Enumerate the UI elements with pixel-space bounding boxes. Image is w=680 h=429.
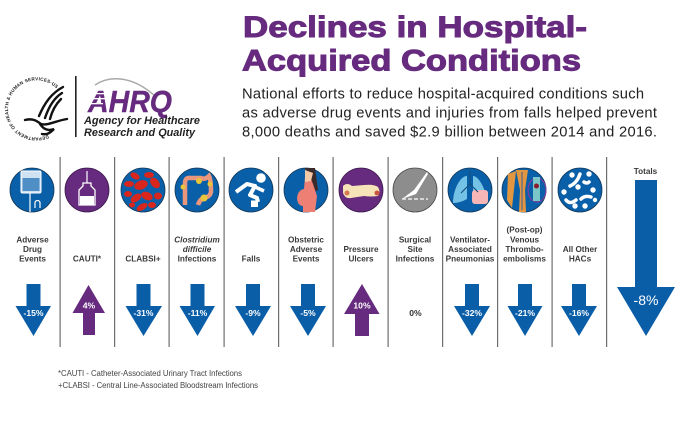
icon: falling figure [229,168,273,212]
intro paragraph: National efforts to reduce hospital-acquired conditions such [242,86,644,102]
title: Declines in Hospital- [243,11,587,44]
arrow: -8%: -8% [634,292,658,308]
icon: scalpel [393,168,437,212]
arrow: 10%: 10% [353,300,371,310]
icon: leg veins [502,168,546,212]
icon: catheter bag [65,168,109,212]
column: Adverse Drug Events: Drug [23,245,42,254]
arrow: -21%: -21% [515,308,535,318]
arrow: 10% [344,284,380,336]
column: Totals [617,167,675,336]
arrow: -31% [126,284,162,336]
icon: pregnant woman [284,168,328,212]
value: 0%: 0% [409,308,422,318]
column: Surgical Site Infections: Infections [396,255,435,264]
icon: lungs [448,168,492,212]
column: Surgical Site Infections: Site [407,245,423,254]
column: Surgical Site Infections [393,168,437,318]
arrow: 4% [72,285,105,335]
arrow: -8% [617,180,675,336]
column: Obstetric Adverse Events [284,168,328,336]
column: Ventilator-Associated Pneumonias [446,168,495,336]
icon: blood cells [121,168,165,213]
icon: colon [175,168,219,212]
footnotes: +CLABSI - Central Line-Associated Bloodstream Infections [58,381,258,390]
column: Venous Thromboembolisms: Venous [510,236,540,244]
column: Falls: Falls [242,255,261,264]
arrow: -32% [454,284,490,336]
column: CAUTI [65,168,109,335]
column: Ventilator-Associated Pneumonias: Ventilator- [450,236,490,244]
icon: bacteria [558,168,602,212]
column: Ventilator-Associated Pneumonias: Pneumonias [446,255,495,264]
column: Ventilator-Associated Pneumonias: Associated [448,245,492,254]
column: Venous Thromboembolisms: embolisms [503,255,546,264]
column: Pressure Ulcers: Ulcers [348,255,374,264]
column: Pressure Ulcers: Pressure [343,245,379,254]
arrow: -31%: -31% [133,308,154,318]
arrow: 4%: 4% [83,300,96,310]
column: Obstetric Adverse Events: Events [293,255,320,264]
icon: IV bag [10,168,54,212]
logo: HHS seal [4,77,68,140]
intro paragraph [242,86,657,140]
column: Venous Thromboembolisms: (Post-op) [507,226,543,235]
footnotes [58,369,258,390]
intro paragraph: 8,000 deaths and saved $2.9 billion between 2014 and 2016. [242,124,657,140]
logo divider [75,76,77,137]
column: Clostridium difficile Infections: Infections [178,255,217,264]
arrow: -9%: -9% [245,308,261,318]
arrow: -16%: -16% [569,308,589,318]
arrow: -15%: -15% [23,308,44,318]
column: Surgical Site Infections: Surgical [399,236,431,244]
column: Clostridium difficile Infections: difficile [183,245,212,254]
logo: AHRQ [83,79,200,139]
column: Pressure Ulcers [339,168,383,336]
arrow: -21% [508,284,542,336]
arrow: -15% [16,284,51,336]
arrow: -11%: -11% [188,308,208,318]
column: CLABSI: CLABSI+ [125,255,161,264]
title: Acquired Conditions [242,44,581,78]
arrow: -16% [561,284,597,336]
column: All Other HACs: All Other [563,245,598,254]
column: Totals: Totals [634,167,658,176]
column: CAUTI: CAUTI* [73,255,102,264]
column: Clostridium difficile Infections [174,168,220,336]
column: Adverse Drug Events: Adverse [16,236,49,244]
logo: AHRQ: Agency for Healthcare [83,115,200,127]
arrow: -5% [290,284,326,336]
arrow: -11% [180,284,215,336]
column: Falls [229,168,273,336]
arrow: -9% [235,284,271,336]
arrow: -32%: -32% [462,308,482,318]
intro paragraph: as adverse drug events and injuries from falls helped prevent [242,106,657,122]
column: All Other HACs [558,168,602,336]
logo: AHRQ: AHRQ [87,84,172,119]
column: Obstetric Adverse Events: Obstetric [288,236,324,244]
column: Adverse Drug Events [10,168,54,336]
column: CLABSI [121,168,165,336]
logo: AHRQ: Research and Quality [84,127,196,139]
title [242,11,587,78]
icon: patient lying down [339,168,383,212]
arrow: -5%: -5% [300,308,316,318]
column: All Other HACs: HACs [569,255,592,264]
column: Obstetric Adverse Events: Adverse [290,245,323,254]
column: Venous Thromboembolisms: Thrombo- [505,245,544,254]
column: Adverse Drug Events: Events [19,255,46,264]
column: Clostridium difficile Infections: Clostridium [174,236,220,244]
column: Venous Thromboembolisms [502,168,546,336]
footnotes: *CAUTI - Catheter-Associated Urinary Tract Infections [58,369,242,378]
